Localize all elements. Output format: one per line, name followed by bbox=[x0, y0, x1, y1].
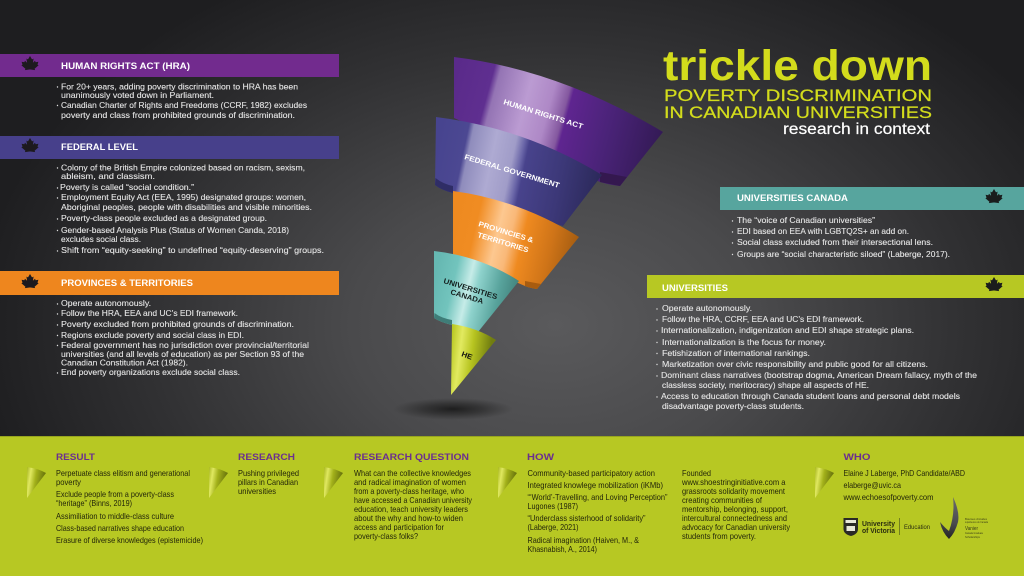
text block: research: universities bbox=[238, 486, 276, 496]
logo: vanier: Bourses d’études bbox=[965, 518, 988, 521]
text block: research question: about the why and how-to widen bbox=[354, 513, 463, 523]
icon: cone bbox=[498, 467, 517, 498]
text block: provinces bullets: Canadian Constitution Act (1982). bbox=[61, 358, 188, 368]
text block: how methods: Integrated knowlege mobilization (iKMb) bbox=[528, 480, 663, 490]
column: research question bbox=[324, 452, 473, 541]
logo: university of victoria: University bbox=[862, 521, 895, 528]
text block: federal level bullets: Aboriginal peoples, people with disabilities and visible minorities. bbox=[61, 203, 312, 212]
text block: federal level bullets: Employment Equity Act (EEA, 1995) designated groups: women, bbox=[61, 193, 306, 202]
column: how bbox=[498, 452, 791, 554]
column: research bbox=[209, 452, 299, 498]
text block: founded: Founded bbox=[682, 468, 711, 478]
title: trickle down bbox=[663, 42, 932, 90]
text block: result: Exclude people from a poverty-class bbox=[56, 489, 174, 499]
text block: research question: What can the collective knowledges bbox=[354, 468, 471, 478]
text block: provinces bullets: Operate autonomously. bbox=[61, 299, 151, 308]
text block: founded: creating communities of bbox=[682, 495, 763, 505]
text block: founded: intercultural connectedness and bbox=[682, 513, 787, 523]
text block: research question: have accessed a Canadian university bbox=[354, 495, 473, 505]
funnel segment: provinces and territories: PROVINCIES & bbox=[477, 219, 535, 245]
text block: universities canada bullets: Social class excluded from their intersectional lens. bbox=[737, 238, 933, 247]
column: who bbox=[815, 452, 989, 539]
text block: federal level bullets: excludes social class. bbox=[61, 235, 141, 244]
text block: founded bbox=[681, 468, 791, 541]
text block: result: “heritage” (Binns, 2019) bbox=[56, 498, 132, 508]
logo: vanier: supérieures du Canada bbox=[965, 521, 989, 524]
text block: universities bullets: Internationalization, indigenization and EDI shape strategic plans. bbox=[661, 326, 914, 335]
heading bar: provinces and territories bbox=[0, 271, 339, 295]
column: result bbox=[27, 452, 203, 545]
heading bar: federal level bbox=[0, 136, 339, 159]
icon: cone bbox=[815, 467, 834, 498]
icon: cone bbox=[324, 467, 343, 498]
heading: research: RESEARCH bbox=[238, 452, 295, 463]
title: POVERTY DISCRIMINATION bbox=[664, 87, 932, 105]
text block: how methods: Radical imagination (Haiven, M., & bbox=[528, 535, 639, 545]
text block: provinces bullets: Regions exclude poverty and social class in EDI. bbox=[61, 331, 244, 340]
text block: research question: access and participation for bbox=[354, 522, 444, 532]
text block: universities bullets: classless society, meritocracy) shape all aspects of HE. bbox=[662, 381, 869, 390]
funnel segment: human rights act: HUMAN RIGHTS ACT bbox=[502, 97, 585, 131]
funnel segment: HE: HE bbox=[460, 349, 474, 362]
text block: provinces bullets: Poverty excluded from prohibited grounds of discrimination. bbox=[61, 320, 294, 329]
logo: university of victoria: of Victoria bbox=[862, 528, 895, 535]
text block: universities bullets: disadvantage poverty-class students. bbox=[662, 402, 804, 411]
panel: federal level bbox=[0, 136, 339, 255]
heading: who: WHO bbox=[844, 452, 871, 463]
text block: result: Erasure of diverse knowledges (epistemicide) bbox=[56, 535, 203, 545]
text block: how methods: Khasnabish, A., 2014) bbox=[528, 544, 597, 554]
text block: universities bullets: Follow the HRA, CCRF, EEA and UC’s EDI framework. bbox=[662, 315, 864, 324]
text block: provinces bullets bbox=[57, 299, 309, 377]
text block: result: Perpetuate class elitism and generational bbox=[56, 468, 190, 478]
logo: university of victoria: Education bbox=[904, 525, 930, 531]
text block: provinces bullets: End poverty organizations exclude social class. bbox=[61, 368, 240, 377]
text block: who: www.echoesofpoverty.com bbox=[843, 492, 934, 502]
heading: research question: RESEARCH QUESTION bbox=[354, 452, 469, 463]
text block: research question bbox=[354, 468, 473, 541]
text block: federal level bullets: Gender-based Analysis Plus (Status of Women Canda, 2018) bbox=[61, 226, 289, 235]
text block: federal level bullets: ableism, and classism. bbox=[61, 172, 155, 181]
text block: research question: poverty-class folks? bbox=[354, 531, 418, 541]
logo: vanier: Canada Graduate bbox=[965, 532, 984, 535]
heading bar: universities canada: UNIVERSITIES CANADA bbox=[737, 193, 848, 204]
heading bar: universities bbox=[647, 275, 1024, 298]
title bbox=[663, 42, 932, 138]
text block: research question: from a poverty-class heritage, who bbox=[354, 486, 464, 496]
text block: human rights act bullets bbox=[57, 82, 307, 120]
heading bar: federal level: FEDERAL LEVEL bbox=[61, 142, 138, 153]
text block: research question: education, teach university leaders bbox=[354, 504, 468, 514]
panel: provinces and territories bbox=[0, 271, 339, 377]
funnel segment: federal government: FEDERAL GOVERNMENT bbox=[463, 152, 561, 190]
funnel segment: universities canada bbox=[434, 251, 519, 332]
title: research in context bbox=[783, 121, 931, 138]
heading: how: HOW bbox=[527, 452, 555, 463]
text block: provinces bullets: universities (and all levels of education) as per Section 93 of the bbox=[61, 350, 305, 359]
text block: human rights act bullets: Canadian Charter of Rights and Freedoms (CCRF, 1982) excludes bbox=[61, 101, 307, 110]
text block: founded: students from poverty. bbox=[682, 531, 756, 541]
text block: federal level bullets: Poverty is called “social condition.” bbox=[60, 183, 194, 192]
heading bar: universities: UNIVERSITIES bbox=[662, 283, 729, 294]
text block: how methods: (Laberge, 2021) bbox=[528, 522, 579, 532]
funnel segment: universities canada: CANADA bbox=[449, 287, 485, 306]
text block: result: poverty bbox=[56, 477, 82, 487]
text block: who bbox=[843, 468, 965, 502]
icon: cone bbox=[209, 467, 228, 498]
text block: research bbox=[238, 468, 299, 496]
text block: universities bullets: Marketization over civic responsibility and public good for all citizens. bbox=[662, 360, 928, 369]
logo: university of victoria bbox=[844, 518, 930, 536]
text block: human rights act bullets: For 20+ years, adding poverty discrimination to HRA has been bbox=[61, 82, 298, 92]
text block: human rights act bullets: unanimously voted down in Parliament. bbox=[61, 91, 214, 100]
panel: human rights act bbox=[0, 54, 339, 120]
text block: universities canada bullets bbox=[732, 216, 950, 259]
logo: vanier bbox=[940, 497, 989, 539]
text block: universities bullets: Internationalization is the focus for money. bbox=[662, 338, 826, 347]
text block: how methods bbox=[528, 468, 668, 554]
text block: research: pillars in Canadian bbox=[238, 477, 298, 487]
text block: universities bullets: Access to education through Canada student loans and personal debt models bbox=[661, 392, 960, 401]
text block: universities bullets: Operate autonomously. bbox=[662, 304, 752, 313]
text block: research: Pushing privileged bbox=[238, 468, 299, 478]
text block: federal level bullets bbox=[57, 164, 324, 255]
text block: how methods: Lugones (1987) bbox=[528, 501, 578, 511]
panel: bottom band bbox=[0, 436, 1024, 576]
text block: founded: advocacy for Canadian university bbox=[682, 522, 791, 532]
text block: universities canada bullets: EDI based on EEA with LGBTQ2S+ an add on. bbox=[737, 227, 909, 236]
text block: result bbox=[56, 468, 203, 545]
text block: result: Assimiliation to middle-class culture bbox=[56, 511, 174, 521]
text block: founded: www.shoestringinitiative.com a bbox=[681, 477, 786, 487]
text block: human rights act bullets: poverty and class from prohibited grounds of discrimination. bbox=[61, 111, 295, 120]
heading bar: human rights act: HUMAN RIGHTS ACT (HRA) bbox=[61, 61, 190, 72]
funnel segment: federal government bbox=[435, 117, 602, 226]
panel: universities canada bbox=[720, 187, 1024, 259]
panel: universities bbox=[647, 275, 1024, 411]
funnel segment: universities canada: UNIVERSITIES bbox=[442, 276, 499, 301]
logo: vanier: Vanier bbox=[965, 526, 978, 532]
text block: how methods: “Underclass sisterhood of solidarity” bbox=[528, 513, 646, 523]
heading bar: provinces and territories: PROVINCES & TERRITORIES bbox=[61, 278, 194, 289]
text block: research question: and radical imagination of women bbox=[354, 477, 466, 487]
heading bar: universities canada bbox=[720, 187, 1024, 210]
text block: provinces bullets: Federal government has no jurisdiction over provincial/territorial bbox=[61, 341, 309, 350]
text block: how methods: Community-based participatory action bbox=[528, 468, 655, 478]
text block: how methods: “‘World’-Travelling, and Loving Perception” bbox=[528, 492, 668, 502]
text block: who: Elaine J Laberge, PhD Candidate/ABD bbox=[844, 468, 965, 478]
title: IN CANADIAN UNIVERSITIES bbox=[664, 104, 932, 122]
text block: universities bullets: Dominant class narratives (bootstrap dogma, American Dream fallacy, myth of the bbox=[661, 371, 978, 380]
funnel segment: provinces and territories bbox=[453, 191, 579, 289]
icon: cone bbox=[27, 467, 46, 498]
text block: result: Class-based narratives shape education bbox=[56, 523, 184, 533]
funnel segment: human rights act bbox=[454, 57, 663, 186]
logo: vanier: Scholarships bbox=[965, 536, 981, 539]
text block: universities bullets: Fetishization of international rankings. bbox=[662, 349, 810, 358]
funnel chart bbox=[434, 57, 663, 395]
heading bar: human rights act bbox=[0, 54, 339, 77]
text block: universities bullets bbox=[656, 304, 978, 411]
text block: federal level bullets: Poverty-class people excluded as a designated group. bbox=[61, 214, 267, 223]
text block: federal level bullets: Shift from “equity-seeking” to undefined “equity-deserving” groups. bbox=[61, 246, 324, 255]
text block: who: elaberge@uvic.ca bbox=[844, 480, 901, 490]
text block: universities canada bullets: Groups are “social characteristic siloed” (Laberge, 2017). bbox=[737, 250, 950, 259]
text block: provinces bullets: Follow the HRA, EEA and UC’s EDI framework. bbox=[61, 309, 238, 318]
funnel segment: provinces and territories: TERRITORIES bbox=[476, 230, 530, 254]
text block: federal level bullets: Colony of the British Empire colonized based on racism, sexism, bbox=[61, 164, 305, 172]
text block: founded: grassroots solidarity movement bbox=[682, 486, 786, 496]
text block: universities canada bullets: The “voice of Canadian universities” bbox=[737, 216, 875, 225]
text block: founded: mentorship, belonging, support, bbox=[682, 504, 788, 514]
funnel shadow bbox=[393, 398, 513, 420]
funnel segment: HE bbox=[451, 324, 496, 395]
heading: result: RESULT bbox=[56, 452, 95, 463]
